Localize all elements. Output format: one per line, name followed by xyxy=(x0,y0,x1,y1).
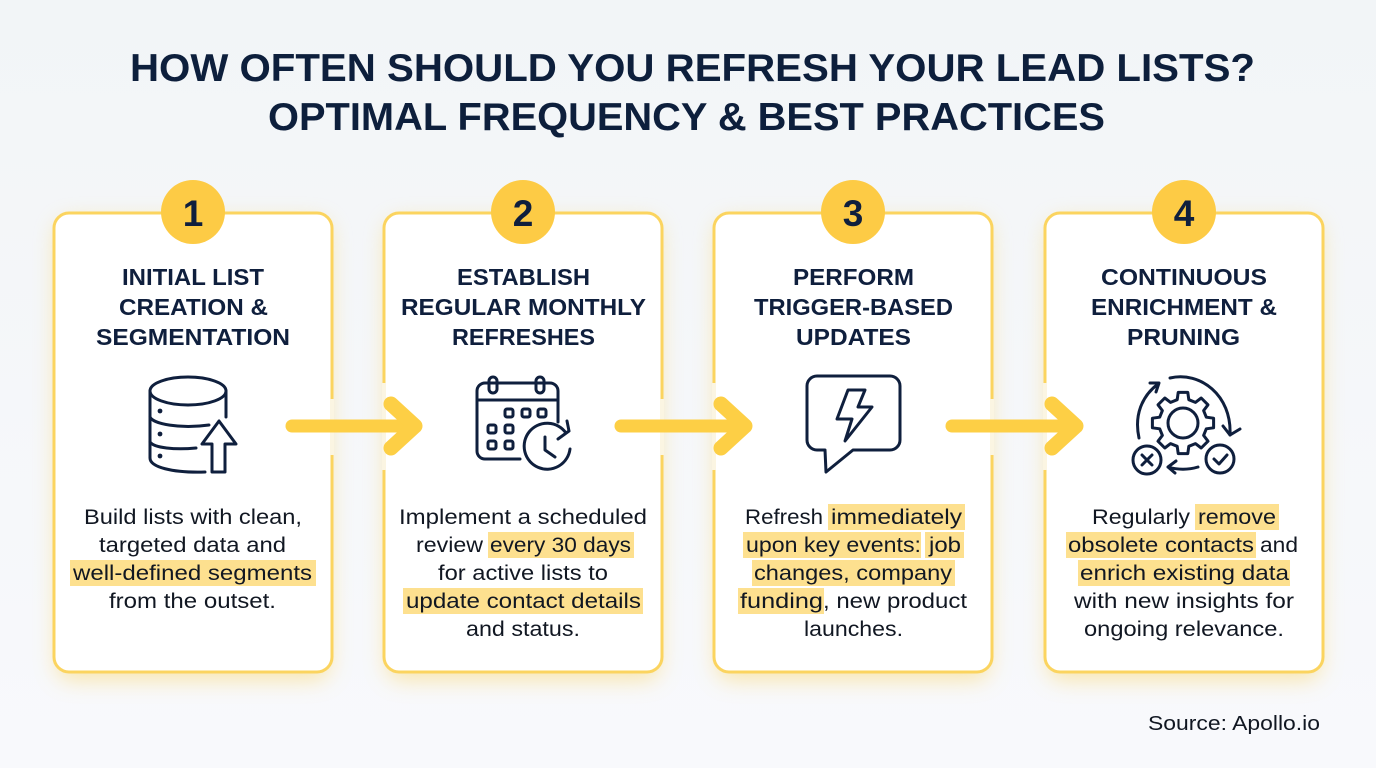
step number 1 xyxy=(161,180,225,244)
icon: gear with cycle arrows xyxy=(1133,377,1240,474)
arrow: step 2 to step 3 xyxy=(621,404,745,448)
body text: step 3 xyxy=(738,504,967,641)
body text: step 3: Refresh xyxy=(745,505,823,529)
body text: step 2 xyxy=(399,505,647,641)
heading: step 1: CREATION & xyxy=(119,294,268,320)
heading: step 3: TRIGGER-BASED xyxy=(754,294,953,320)
heading: step 1: SEGMENTATION xyxy=(96,324,290,350)
body text: step 2: and status. xyxy=(466,617,580,641)
body text: step 4: ongoing relevance. xyxy=(1084,617,1284,641)
body text: step 4 xyxy=(1066,504,1298,641)
body text: step 3: launches. xyxy=(804,617,903,641)
step number 2: 2 xyxy=(513,193,533,234)
body text: step 4: enrich existing data xyxy=(1080,561,1289,585)
heading: step 1: INITIAL LIST xyxy=(122,264,264,290)
heading: step 2: ESTABLISH xyxy=(457,264,590,290)
title: HOW OFTEN SHOULD YOU REFRESH YOUR LEAD LISTS? xyxy=(130,47,1255,90)
heading: step 4: CONTINUOUS xyxy=(1101,264,1267,290)
heading: step 4: ENRICHMENT & xyxy=(1091,294,1277,320)
panel: step 2 monthly refreshes xyxy=(384,180,662,680)
body text: step 3: job xyxy=(928,533,961,557)
body text: step 1: well-defined segments xyxy=(72,561,312,585)
body text: step 4: Regularly xyxy=(1092,505,1190,529)
body text: step 4: obsolete contacts xyxy=(1068,533,1254,557)
heading: step 4 xyxy=(1091,264,1277,350)
heading: step 2 xyxy=(401,264,646,350)
body text: step 1: Build lists with clean, xyxy=(84,505,302,529)
icon: database with upload arrow xyxy=(150,377,236,472)
body text: step 3: immediately xyxy=(831,505,962,529)
body text: step 2: for active lists to xyxy=(438,561,608,585)
title: OPTIMAL FREQUENCY & BEST PRACTICES xyxy=(268,96,1105,139)
step number 4: 4 xyxy=(1174,193,1195,234)
step number 3: 3 xyxy=(843,193,863,234)
heading: step 3 xyxy=(754,264,953,350)
body text: step 2: Implement a scheduled xyxy=(399,505,647,529)
body text: step 1: from the outset. xyxy=(109,589,276,613)
heading: step 3: UPDATES xyxy=(796,324,911,350)
body text: step 2: review xyxy=(416,533,483,557)
arrow: step 3 to step 4 xyxy=(952,404,1076,448)
panel: step 3 trigger-based updates xyxy=(714,180,992,680)
body text: step 4: with new insights for xyxy=(1073,589,1294,613)
body text: step 3: funding xyxy=(740,589,823,613)
body text: step 3: , new product xyxy=(823,589,967,613)
heading: step 2: REFRESHES xyxy=(452,324,595,350)
panel: step 1 initial list creation xyxy=(54,180,332,680)
heading: step 4: PRUNING xyxy=(1127,324,1240,350)
step number 3 xyxy=(821,180,885,244)
source note: Source: Apollo.io xyxy=(1148,712,1320,735)
title xyxy=(130,47,1255,139)
icon: speech bubble with lightning bolt xyxy=(807,376,900,472)
icon: calendar with clock xyxy=(477,377,570,469)
step number 2 xyxy=(491,180,555,244)
step number 1: 1 xyxy=(183,193,203,234)
body text: step 1 xyxy=(70,505,316,613)
body text: step 3: upon key events: xyxy=(746,533,921,557)
step number 4 xyxy=(1152,180,1216,244)
body text: step 2: update contact details xyxy=(406,589,641,613)
heading: step 3: PERFORM xyxy=(793,264,914,290)
arrow: step 1 to step 2 xyxy=(292,404,415,448)
body text: step 4: and xyxy=(1260,533,1298,557)
body text: step 1: targeted data and xyxy=(99,533,286,557)
heading: step 2: REGULAR MONTHLY xyxy=(401,294,646,320)
body text: step 2: every 30 days xyxy=(490,533,631,557)
heading: step 1 xyxy=(96,264,290,350)
body text: step 4: remove xyxy=(1198,505,1276,529)
body text: step 3: changes, company xyxy=(754,561,952,585)
panel: step 4 enrichment and pruning xyxy=(1045,180,1323,680)
